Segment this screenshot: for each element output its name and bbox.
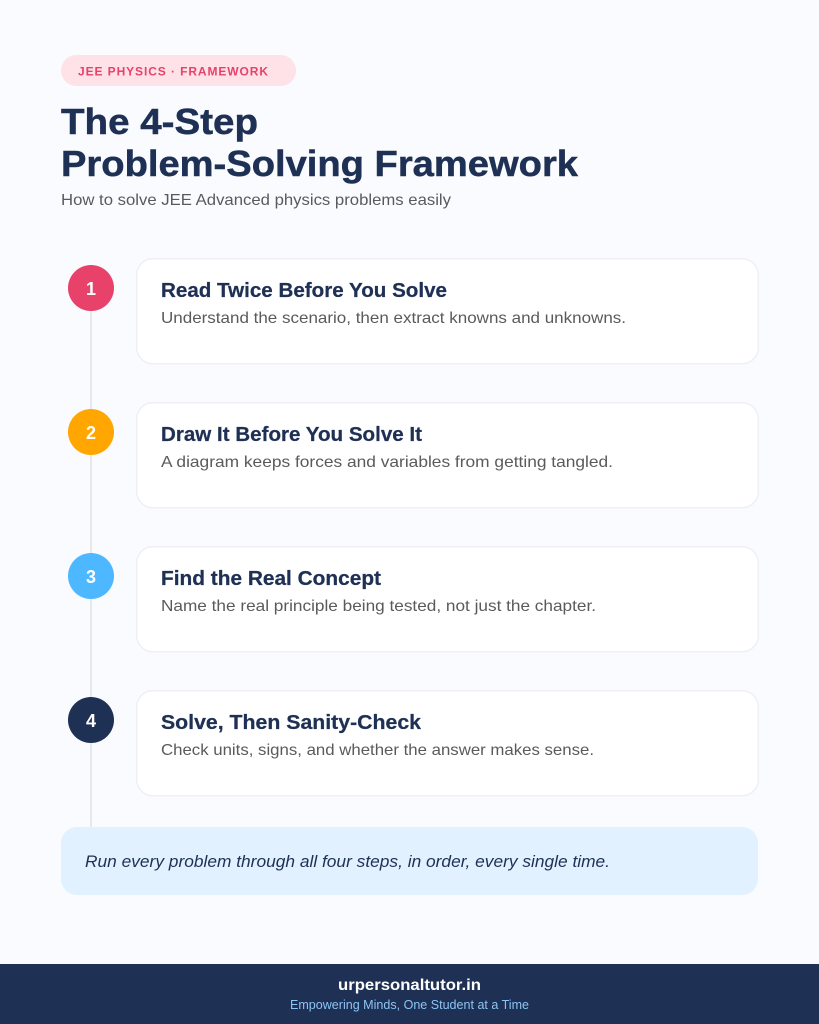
subtitle: How to solve JEE Advanced physics problems easily — [61, 192, 451, 209]
timeline line — [90, 288, 92, 827]
step 4 card — [137, 691, 758, 796]
footer: Empowering Minds, One Student at a Time — [290, 998, 529, 1012]
callout — [61, 827, 758, 895]
step 4 badge: 4 — [86, 711, 96, 731]
step 3 badge — [68, 553, 114, 599]
footer — [0, 964, 819, 1024]
tag pill: JEE PHYSICS · FRAMEWORK — [78, 64, 268, 78]
step 1 — [68, 259, 758, 364]
step 4 — [68, 691, 758, 796]
step 4 badge — [68, 697, 114, 743]
step 4 card: Solve, Then Sanity-Check — [161, 712, 422, 734]
step 2 card: Draw It Before You Solve It — [161, 424, 422, 446]
step 2 badge — [68, 409, 114, 455]
step 4 card: Check units, signs, and whether the answer makes sense. — [161, 742, 594, 759]
step 2 card — [137, 403, 758, 508]
step 3 card: Find the Real Concept — [161, 568, 381, 590]
step 2 card: A diagram keeps forces and variables from getting tangled. — [161, 454, 613, 471]
step 2 badge: 2 — [86, 423, 96, 443]
step 1 badge: 1 — [86, 279, 96, 299]
step 3 — [68, 547, 758, 652]
step 1 card — [137, 259, 758, 364]
step 1 card: Read Twice Before You Solve — [161, 280, 447, 302]
step 3 badge: 3 — [86, 567, 96, 587]
step 1 badge — [68, 265, 114, 311]
step 3 card: Name the real principle being tested, not just the chapter. — [161, 598, 596, 615]
title — [61, 101, 579, 184]
callout: Run every problem through all four steps, in order, every single time. — [85, 853, 610, 871]
step 3 card — [137, 547, 758, 652]
footer: urpersonaltutor.in — [338, 977, 481, 994]
tag pill — [61, 55, 296, 86]
title: The 4-Step — [61, 101, 258, 142]
step 1 card: Understand the scenario, then extract knowns and unknowns. — [161, 310, 626, 327]
title: Problem-Solving Framework — [61, 143, 579, 184]
step 2 — [68, 403, 758, 508]
